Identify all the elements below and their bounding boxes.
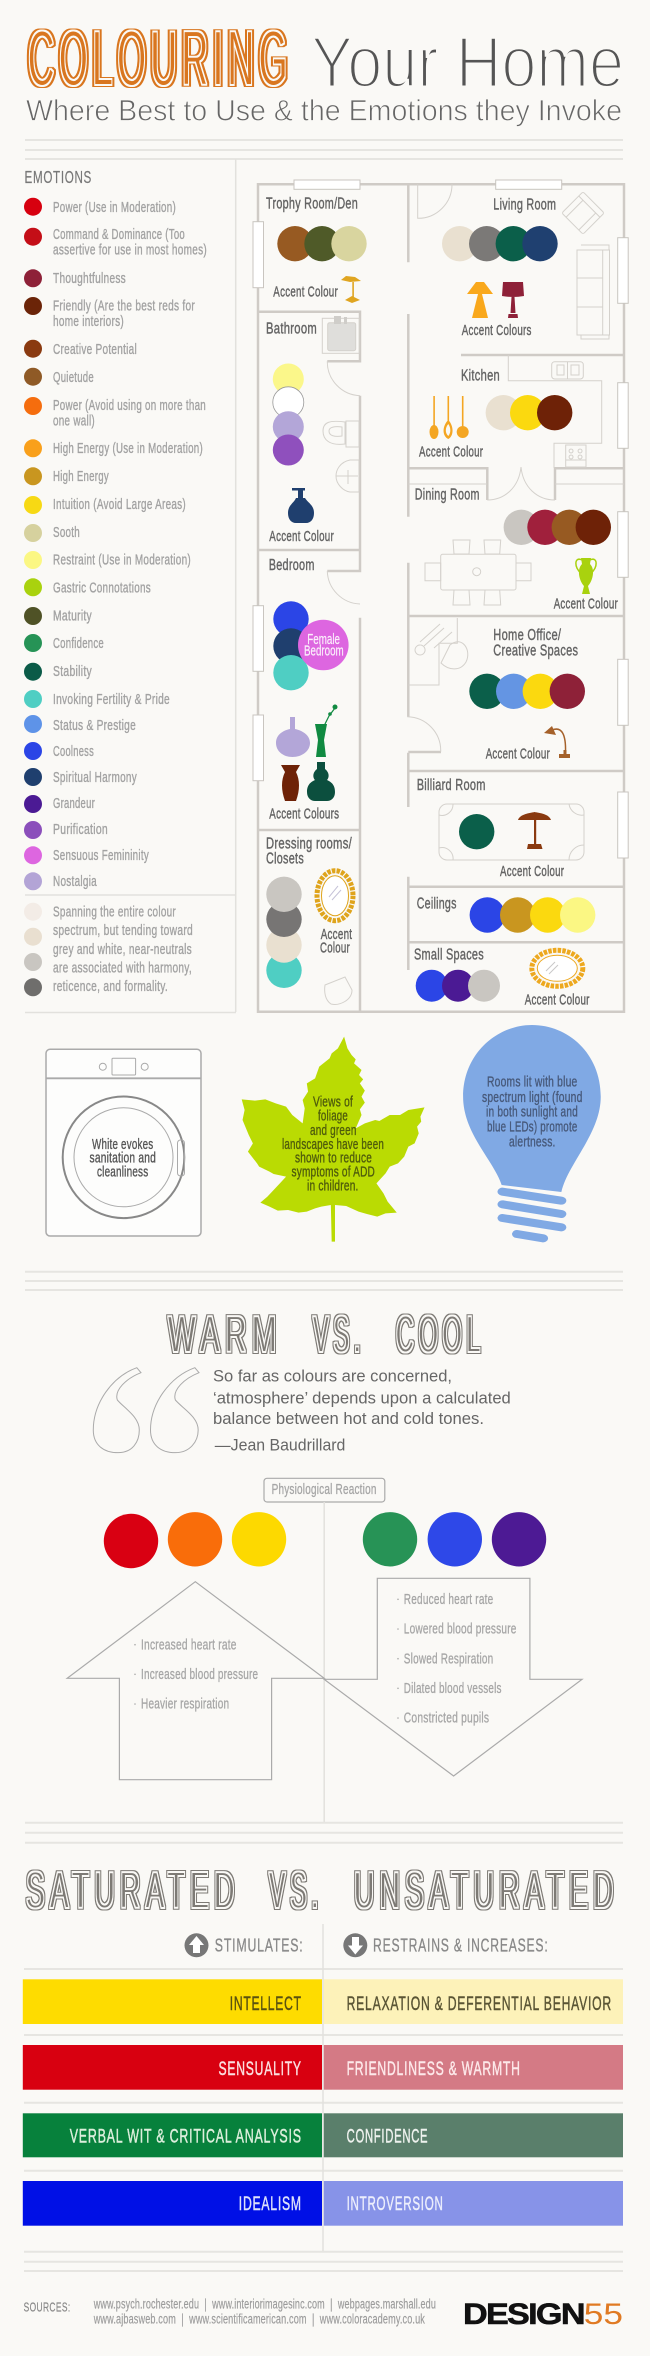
band: red: FRIENDLINESS & WARMTH [347, 2059, 521, 2080]
accent colour labels: Accent [321, 927, 352, 943]
logo: design55: 55 [584, 2298, 623, 2331]
legend item: sensuous femininity [24, 846, 149, 864]
heading: saturated vs unsaturated: SATURATED [26, 1862, 240, 1920]
floor plan walls [258, 184, 624, 1012]
icon: bedroom vases [276, 704, 338, 801]
text: COOL [396, 1306, 485, 1364]
legend item: sooth [24, 524, 80, 542]
room labels: Living Room [493, 196, 556, 213]
legend item: command and dominance [24, 227, 207, 258]
icon: washing machine [46, 1049, 201, 1236]
accent colour labels: Accent Colour [269, 529, 334, 545]
icon: soap dispenser [288, 488, 314, 523]
room labels: Dressing rooms/ [266, 835, 352, 852]
band: yellow [23, 1979, 623, 2024]
legend item: coolness: Coolness [53, 744, 94, 760]
label: physiological reaction [264, 1478, 385, 1502]
swatches: bedroom [273, 601, 349, 690]
room labels: Bedroom [269, 557, 315, 574]
room labels: Dining Room [415, 486, 480, 503]
swatches: living room [442, 226, 558, 261]
swatches: bedroom: Female [307, 632, 340, 648]
legend item: grandeur [24, 795, 95, 813]
logo: design55: DESIGN [463, 2298, 584, 2331]
legend item: spiritual harmony: Spiritual Harmony [53, 770, 137, 786]
accent colour labels: Accent Colours [462, 323, 532, 339]
icon: small spaces mirror [532, 950, 583, 986]
legend item: spiritual harmony [24, 768, 137, 786]
icon: trophy room lamp [341, 276, 361, 303]
swatches: small spaces [416, 970, 500, 1002]
bulb caption: Rooms lit with blue [487, 1075, 578, 1091]
legend item: restraint: Restraint (Use in Moderation) [53, 552, 191, 568]
legend item: power avoid [24, 397, 206, 430]
legend item: purification: Purification [53, 822, 108, 838]
legend item: command and dominance: Command & Dominance (Too [53, 227, 185, 243]
legend item: quietude [24, 368, 94, 386]
legend item: gastric connotations: Gastric Connotations [53, 580, 151, 596]
room labels: Home Office/ [493, 627, 562, 644]
accent colour labels: Accent Colour [500, 864, 564, 880]
bulb caption: alertness. [509, 1135, 556, 1151]
legend item: invoking fertility: Invoking Fertility & Pride [53, 692, 170, 708]
heading: warm vs cool: VS. [313, 1306, 365, 1364]
legend item: neutrals: grey and white, near-neutrals [53, 942, 192, 958]
legend item: creative potential [24, 340, 137, 358]
legend item: power avoid: Power (Avoid using on more than [53, 398, 206, 414]
washing machine caption: White evokes [92, 1137, 153, 1153]
legend item: stability: Stability [53, 664, 92, 680]
warm colour swatches [104, 1512, 286, 1568]
leaf caption: symptoms of ADD [292, 1165, 375, 1181]
legend item: maturity: Maturity [53, 608, 92, 624]
legend item: thoughtfulness [24, 269, 126, 287]
icon: leaf [242, 1037, 425, 1242]
quote text: balance between hot and cold tones. [213, 1409, 484, 1428]
column header: restrains and increases: RESTRAINS & INCREASES: [373, 1935, 548, 1956]
heading: emotions: EMOTIONS [24, 167, 92, 187]
leaf caption: Views of [313, 1095, 353, 1111]
room labels: Bathroom [266, 320, 317, 337]
icon: light bulb [463, 1025, 601, 1238]
accent colour labels: Accent Colour [525, 992, 590, 1008]
legend item: power [24, 198, 176, 216]
accent colour labels: Accent Colour [554, 597, 618, 613]
legend item: neutrals: Spanning the entire colour [53, 904, 176, 920]
footer: sources: www.psych.rochester.edu | www.interiorimagesinc.com | webpages.marshall.edu [93, 2296, 436, 2311]
bulb caption: spectrum light (found [482, 1090, 582, 1106]
swatches: bathroom [273, 364, 304, 466]
heading: saturated vs unsaturated: VS. [269, 1862, 323, 1920]
room labels: Closets [266, 850, 304, 867]
heading: warm vs cool: WARM [168, 1306, 282, 1364]
legend item: coolness [24, 742, 94, 760]
legend item: friendly: Friendly (Are the best reds for [53, 298, 195, 314]
swatches: dining room [504, 510, 611, 545]
room labels: Kitchen [461, 368, 500, 385]
icon: living room lamps [467, 282, 524, 318]
leaf caption: landscapes have been [282, 1137, 384, 1153]
logo: design55 [463, 2298, 623, 2331]
footer: sources [24, 2296, 436, 2326]
heading: saturated vs unsaturated [26, 1862, 619, 1920]
legend item: maturity [24, 607, 92, 625]
icon: kitchen utensils [430, 396, 469, 439]
legend item: nostalgia [24, 872, 97, 890]
leaf caption [282, 1095, 384, 1194]
band: green: CONFIDENCE [347, 2127, 428, 2148]
sink taps [334, 316, 347, 324]
leaf caption: shown to reduce [295, 1151, 372, 1167]
leaf caption: foliage [318, 1109, 348, 1125]
legend item: sensuous femininity: Sensuous Femininity [53, 848, 149, 864]
arrow: cool down arrow: Reduced heart rate [404, 1592, 493, 1608]
legend item: high energy [24, 467, 109, 485]
room labels: Billiard Room [417, 777, 486, 794]
room labels: Creative Spaces [493, 643, 578, 660]
icon: quotation marks [93, 1368, 199, 1453]
legend item: purification [24, 821, 108, 839]
room labels: Ceilings [417, 895, 457, 912]
legend item: restraint [24, 551, 191, 569]
arrow: cool down arrow: Lowered blood pressure [404, 1622, 517, 1638]
swatches: kitchen [486, 395, 572, 430]
quote text: —Jean Baudrillard [215, 1436, 345, 1455]
column header: stimulates: STIMULATES: [215, 1935, 304, 1956]
arrow: cool down arrow: Slowed Respiration [404, 1651, 493, 1667]
legend item: command and dominance: assertive for use in most homes) [53, 242, 207, 258]
icon: dressing room mirror [317, 871, 353, 921]
arrow: warm up arrow: Increased blood pressure [141, 1667, 258, 1683]
heading: warm vs cool [168, 1306, 485, 1364]
arrow: warm up arrow [67, 1582, 324, 1780]
icon: office desk lamp [544, 726, 570, 758]
swatches: home office [469, 674, 585, 709]
swatches: trophy room [277, 226, 367, 261]
legend item: intuition: Intuition (Avoid Large Areas) [53, 497, 186, 513]
bulb caption [482, 1075, 582, 1151]
legend item: nostalgia: Nostalgia [53, 874, 97, 890]
accent colour labels: Accent Colours [269, 806, 339, 822]
legend item: sooth: Sooth [53, 525, 80, 541]
band: green: VERBAL WIT & CRITICAL ANALYSIS [70, 2127, 302, 2148]
furniture outlines [322, 184, 624, 1004]
legend item: high energy: High Energy [53, 469, 109, 485]
legend item: friendly [24, 297, 195, 330]
legend item: neutrals [24, 903, 193, 996]
accent colour labels: Colour [320, 941, 350, 957]
leaf caption: in children. [307, 1178, 359, 1194]
leaf caption: and green [310, 1123, 357, 1139]
quote text [213, 1367, 511, 1455]
swatches: bedroom: Bedroom [304, 644, 344, 660]
band: green [23, 2113, 623, 2157]
label: physiological reaction: Physiological Reaction [272, 1482, 377, 1498]
legend item: neutrals: reticence, and formality. [53, 979, 168, 995]
column header: stimulates [184, 1933, 304, 1957]
footer: sources: www.ajbasweb.com | www.scientificamerican.com | www.coloracademy.co.uk [93, 2311, 425, 2326]
subtitle: Where Best to Use & the Emotions they Invoke [26, 94, 622, 128]
accent colour labels [269, 285, 618, 1008]
arrow: cool down arrow [324, 1578, 582, 1776]
band: blue [23, 2181, 623, 2226]
accent colour labels: Accent Colour [486, 746, 550, 762]
windows [253, 180, 628, 858]
band: blue: INTROVERSION [347, 2194, 444, 2215]
legend item: quietude: Quietude [53, 370, 94, 386]
footer: sources: SOURCES: [24, 2300, 71, 2315]
room labels: Trophy Room/Den [266, 195, 358, 212]
legend item: gastric connotations [24, 578, 151, 596]
legend item: status [24, 715, 136, 734]
legend item: grandeur: Grandeur [53, 796, 95, 812]
panel: emotions legend [24, 167, 207, 996]
band: red: SENSUALITY [218, 2059, 302, 2080]
bathroom sink basin [328, 323, 356, 351]
arrow: warm up arrow: Increased heart rate [141, 1637, 237, 1653]
swatches: ceilings [470, 897, 595, 933]
washing machine caption: sanitation and [90, 1151, 156, 1167]
legend item: power avoid: one wall) [53, 414, 95, 430]
legend item: friendly: home interiors) [53, 314, 124, 330]
quote text: ‘atmosphere’ depends upon a calculated [213, 1388, 511, 1407]
washing machine caption: cleanliness [97, 1165, 148, 1181]
legend item: power: Power (Use in Moderation) [53, 200, 176, 216]
bulb caption: in both sunlight and [486, 1105, 578, 1121]
legend item: invoking fertility [24, 690, 170, 708]
panel: floor plan [253, 180, 628, 1012]
band: red [23, 2045, 623, 2090]
legend item: stability [24, 663, 92, 681]
arrow: cool down arrow: Constricted pupils [404, 1711, 489, 1727]
band: blue: IDEALISM [239, 2194, 302, 2215]
room labels [266, 195, 578, 963]
swatch: billiard room [459, 814, 494, 849]
legend item: creative potential: Creative Potential [53, 342, 137, 358]
column header: restrains and increases [343, 1933, 548, 1957]
accent colour labels: Accent Colour [273, 285, 338, 301]
arrow: warm up arrow: Heavier respiration [141, 1697, 229, 1713]
legend item: high energy moderation [24, 439, 203, 457]
accent colour labels: Accent Colour [419, 445, 483, 461]
cool colour swatches [363, 1512, 546, 1567]
icon: dining room vase [576, 558, 596, 594]
arrow: cool down arrow: Dilated blood vessels [404, 1681, 502, 1697]
legend item: neutrals: spectrum, but tending toward [53, 923, 193, 939]
legend item: thoughtfulness: Thoughtfulness [53, 271, 126, 287]
band: yellow: INTELLECT [230, 1994, 302, 2015]
legend item: high energy moderation: High Energy (Use in Moderation) [53, 441, 203, 457]
legend item: neutrals: are associated with harmony, [53, 960, 192, 976]
icon: billiard table lamp [518, 812, 551, 849]
legend item: confidence: Confidence [53, 636, 104, 652]
quote text: So far as colours are concerned, [213, 1367, 452, 1386]
legend item: intuition [24, 496, 186, 514]
washing machine caption [90, 1137, 156, 1181]
swatches: dressing rooms [266, 877, 302, 988]
legend item: status: Status & Prestige [53, 718, 136, 734]
room labels: Small Spaces [414, 946, 484, 963]
title: COLOURING [28, 14, 292, 102]
bulb caption: blue LEDs) promote [487, 1120, 578, 1136]
legend item: confidence [24, 634, 104, 652]
